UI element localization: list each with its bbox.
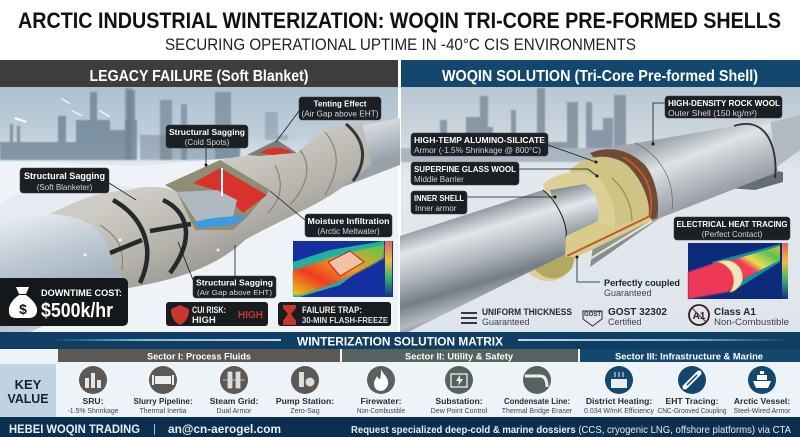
callout: superfine glass wool [411,162,598,185]
callout: perfectly coupled: Perfectly coupled [604,278,680,289]
item: slurry pipeline: Thermal Inertia [139,408,187,415]
badge: class a1 [689,305,789,327]
tri-core insulation layers [528,149,658,281]
panel heading: legacy failure [0,60,398,87]
item: firewater: Firewater: [360,396,402,406]
callout: inner shell: Inner armor [415,204,457,213]
snow ground [0,145,398,332]
badge: gost 32302: GOST 32302 [608,307,667,318]
callout: electrical heat tracing: ELECTRICAL HEAT TRACING [676,219,788,229]
item: firewater [357,366,405,415]
badge: uniform thickness [461,307,572,327]
callout: electrical heat tracing: (Perfect Contact) [702,230,763,239]
label: structural sagging air gap: Structural Sagging [196,278,273,288]
item: district heating [584,366,654,415]
panel heading: woqin solution [401,60,800,87]
footer bar [0,417,800,437]
panel: legacy failure [0,60,400,332]
badge: cui risk [166,302,268,326]
badge: cui risk: HIGH [238,310,263,321]
label: tenting effect [276,97,381,142]
key value cell: VALUE [8,391,49,406]
badge: downtime cost: DOWNTIME COST: [41,288,122,299]
narrow inner pipe [550,184,598,240]
callout: inner shell: INNER SHELL [414,193,464,203]
panel: winterization solution matrix [0,332,800,418]
callout: high-temp alumino-silicate: HIGH-TEMP ALUMINO-SILICATE [414,135,545,145]
item: slurry pipeline [134,366,193,415]
badge: gost 32302: Certified [608,317,642,327]
label: structural sagging air gap: (Air Gap above EHT) [197,288,272,297]
badge: downtime cost [0,278,128,326]
item: arctic vessel: Arctic Vessel: [734,396,790,406]
label: moisture infiltration: Moisture Infiltration [308,216,390,226]
matrix heading: WINTERIZATION SOLUTION MATRIX [297,334,503,348]
callout: perfectly coupled [576,256,680,298]
label: structural sagging air gap [178,242,276,298]
item: pump station: Zero-Sag [290,408,320,415]
refinery skyline [0,88,288,160]
sector II heading [342,349,578,362]
item: arctic vessel [734,366,791,415]
callout: high-density rock wool: HIGH-DENSITY ROCK WOOL [668,98,780,108]
item: steam grid [210,366,258,415]
bare pipe left [0,205,125,332]
item: condensate line: Condensate Line: [504,396,570,406]
item: substation [431,366,488,415]
item: pump station: Pump Station: [276,396,334,406]
badge: cui risk: CUI RISK: [192,305,226,316]
soft blanket [50,122,372,288]
label: moisture infiltration [270,191,392,237]
item: eht tracing: EHT Tracing: [665,396,719,406]
sector II heading: Sector II: Utility & Safety [405,352,514,362]
open cut showing inner pipe and red gap [165,160,270,230]
item: arctic vessel: Steel-Wired Armor [734,408,791,415]
panel heading: legacy failure: LEGACY FAILURE (Soft Blanket) [90,68,308,85]
callout: high-density rock wool [652,96,782,146]
item: steam grid: Steam Grid: [210,396,258,406]
callout: high-temp alumino-silicate [411,133,598,164]
icon: money bag: $ [19,301,27,317]
badge: gost 32302 [583,307,667,327]
matrix heading [0,332,800,349]
panel: woqin solution [400,60,800,336]
badge: class a1: A1 [693,311,706,322]
key value cell: KEY [15,377,42,392]
tenting red gap [247,140,297,156]
label: structural sagging cold spots: Structural Sagging [169,127,245,137]
key value cell [0,364,56,417]
badge: downtime cost: $500k/hr [41,300,113,322]
badge: uniform thickness: UNIFORM THICKNESS [482,307,572,318]
badge: class a1: Non-Combustible [714,317,789,327]
far pipe [765,115,800,172]
badge: uniform thickness: Guaranteed [482,317,530,327]
outer rock wool shell [590,120,778,267]
snowflakes [14,98,220,298]
badge: failure trap: 30-MIN FLASH-FREEZE [302,315,388,325]
badge: failure trap: FAILURE TRAP: [302,305,362,316]
badge: failure trap [278,302,391,326]
item: district heating: District Heating: [586,396,652,406]
sector III heading [580,349,800,362]
label: structural sagging cold spots: (Cold Spots) [185,138,230,147]
callout: high-density rock wool: Outer Shell (150 kg/m²) [668,109,757,118]
pipe right [325,118,400,190]
callout: inner shell [411,191,556,214]
item: eht tracing: CNC-Grooved Coupling [658,408,727,415]
item: SRU: -1.5% Shrinkage [68,408,119,415]
item: district heating: 0.034 W/mK Efficiency [584,408,654,415]
refinery skyline [401,88,631,162]
thermal image: woqin [688,243,788,299]
badge: gost 32302: GOST [584,312,601,318]
label: structural sagging cold spots [166,125,248,166]
item: steam grid: Dual Armor [216,408,252,415]
item: condensate line [502,366,573,415]
separator: | [153,423,156,435]
item: substation: Dew Point Control [431,408,488,415]
callout: superfine glass wool: Middle Barrier [414,175,464,184]
sector I heading: Sector I: Process Fluids [147,352,251,362]
item: SRU [68,366,119,415]
badge: class a1: Class A1 [714,307,756,318]
label: structural sagging soft blanketer: Structural Sagging [24,171,105,181]
callout: electrical heat tracing [674,217,790,240]
steel support [727,170,783,190]
callout: high-temp alumino-silicate: Armor (-1.5% Shrinkage @ 800°C) [414,146,541,155]
callout: perfectly coupled: Guaranteed [604,288,652,298]
large inner pipe [400,190,566,336]
panel heading: woqin solution: WOQIN SOLUTION (Tri-Core Pre-formed Shell) [442,68,758,85]
item: slurry pipeline: Slurry Pipeline: [134,396,193,406]
label: moisture infiltration: (Arctic Meltwater) [317,227,380,236]
label: tenting effect: (Air Gap above EHT) [302,110,379,118]
subtitle: SECURING OPERATIONAL UPTIME IN -40°C CIS ENVIRONMENTS [165,35,636,54]
item: condensate line: Thermal Bridge Eraser [502,408,573,415]
label: structural sagging soft blanketer: (Soft Blanketer) [37,183,93,192]
item: eht tracing [658,366,727,415]
label: tenting effect: Tenting Effect [314,100,367,108]
badge: cui risk: HIGH [192,315,216,326]
call to action: Request specialized deep-cold & marine dossiers (CCS, cryogenic LNG, offshore platforms) via CTA [351,424,791,436]
company name: HEBEI WOQIN TRADING [9,422,140,436]
email: an@cn-aerogel.com [168,422,281,436]
callout: superfine glass wool: SUPERFINE GLASS WOOL [414,164,516,174]
sector I heading [58,349,340,362]
label: structural sagging soft blanketer [20,168,136,200]
item: SRU: SRU: [82,396,104,406]
item: substation: Substation: [435,396,483,406]
icon: hourglass [283,305,296,325]
sector III heading: Sector III: Infrastructure & Marine [615,352,763,362]
yellow wedge and copper heat trace [565,157,652,262]
item: firewater: Non-Combustible [357,408,405,415]
thermal image: legacy [293,241,393,297]
icon: shield [171,305,189,325]
item: pump station [276,366,334,415]
